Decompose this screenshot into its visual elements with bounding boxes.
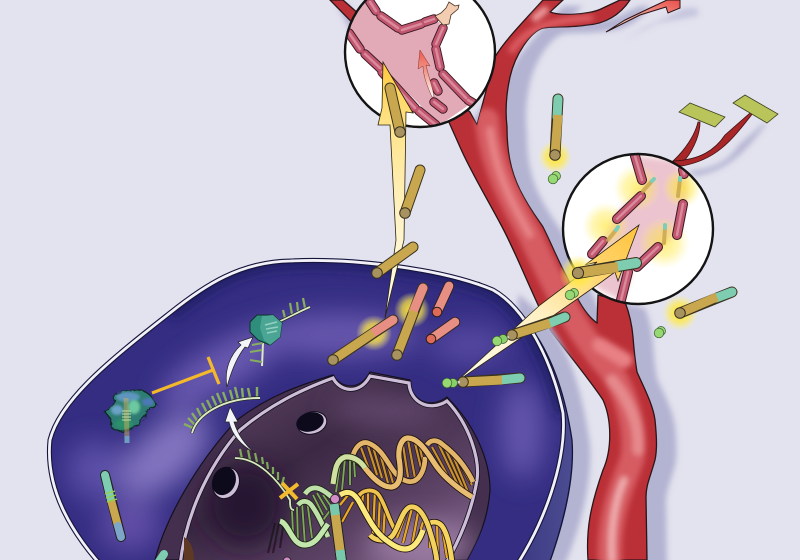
inhibition T bar (152, 357, 219, 393)
rod top right (550, 99, 560, 160)
rod mid arrow (400, 170, 420, 218)
circle inset: endothelium top (345, 0, 495, 127)
arrow: mRNA export (225, 407, 255, 453)
rods gold (328, 88, 732, 388)
purple mottling (67, 308, 544, 550)
pink rods (426, 286, 455, 344)
arrow: upward to circle 1 (378, 62, 413, 318)
cell shadow (518, 294, 590, 560)
brown fragment (184, 537, 194, 560)
arrow: to ribosome (226, 337, 253, 387)
mRNA in cytoplasm (184, 387, 260, 433)
rod over circle 2 (572, 263, 636, 279)
glows around rods (356, 140, 698, 351)
arrow: to circle 2 (456, 225, 639, 382)
tissue block 2 (733, 95, 778, 123)
nuclear pore 2 (294, 408, 329, 438)
circle inset: capillary leak (563, 154, 713, 304)
rod left in cytoplasm (105, 475, 121, 537)
rod near nuclear pore (442, 377, 520, 388)
mRNA strand in nucleus (235, 449, 294, 510)
leak glows (582, 164, 702, 269)
ribosome with mRNA (250, 298, 310, 366)
nucleus rim outline (180, 376, 478, 560)
RISC complex blob (105, 390, 157, 443)
artery (330, 0, 680, 560)
rod at cell edge (372, 247, 413, 278)
rod gold-pink 2 (392, 288, 423, 360)
tissue stub (435, 2, 459, 25)
cell membrane thickness (480, 283, 572, 560)
DNA green helix (268, 457, 365, 553)
nucleus (155, 372, 490, 560)
rod on arrow 1 (390, 88, 405, 137)
blood flow arrow (418, 50, 434, 97)
pink dot bottom (283, 557, 291, 560)
capillary branches with green tissue (673, 103, 753, 166)
small leaking rods (608, 180, 680, 243)
nuclear pore 1 (208, 463, 244, 503)
rod at cell right edge (492, 317, 565, 346)
teal rod bottom-left (156, 554, 164, 560)
rod at DNA (330, 494, 342, 560)
free green caps (548, 172, 666, 338)
blocked cross (280, 483, 298, 499)
DNA upper gold helix (340, 438, 473, 497)
cell (49, 260, 572, 560)
artery shadow (337, 4, 767, 560)
rod gold-pink 1 (328, 320, 393, 365)
small top-right vessel (606, 0, 680, 32)
tissue block 1 (679, 103, 725, 127)
DNA lower yellow helix (340, 490, 452, 560)
rod bottom right (675, 292, 732, 318)
